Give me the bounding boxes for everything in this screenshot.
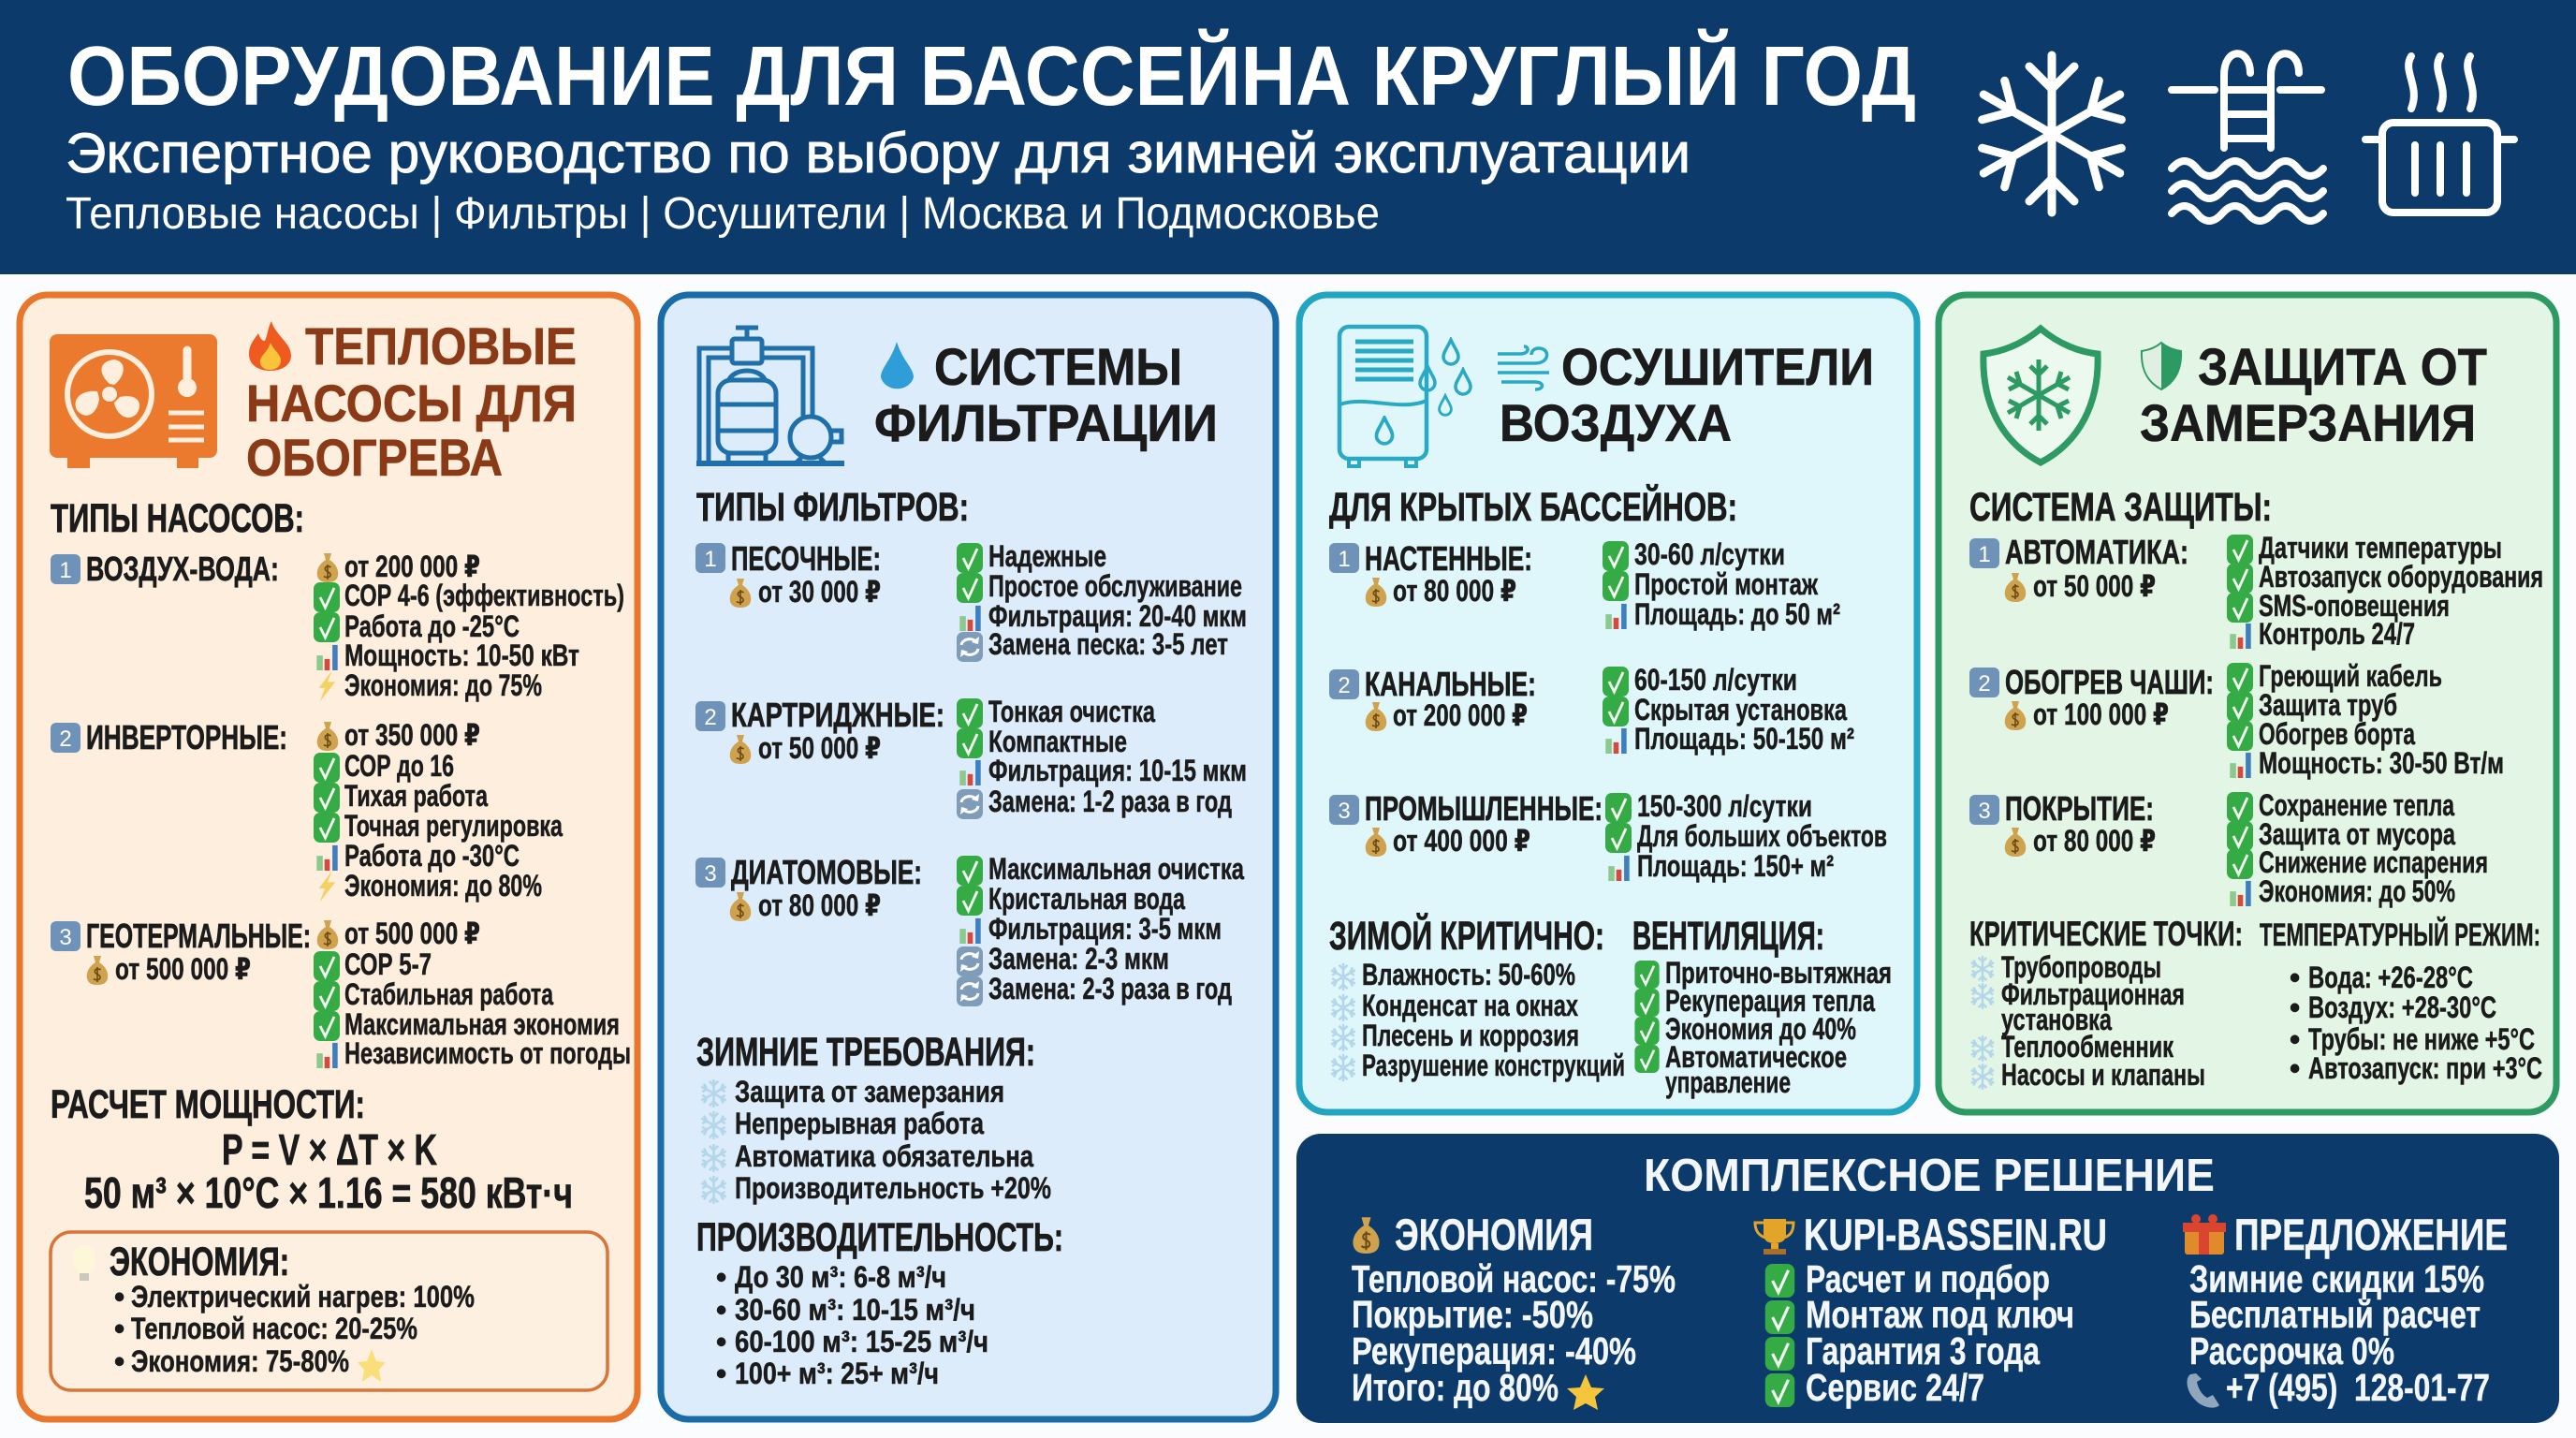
dehumidifier 1: wall: НАСТЕННЫЕ: (1365, 539, 1532, 578)
winter requirements: Автоматика обязательна (735, 1139, 1033, 1173)
temperature mode list: Вода: +26-28°C (2308, 961, 2473, 994)
critical points list: Трубопроводы (2001, 950, 2161, 984)
column: kupi-bassein.ru: KUPI-BASSEIN.RU (1804, 1210, 2107, 1259)
filter type 3: diatomite (695, 852, 1244, 1006)
dehumidifier 1: wall: Простой монтаж (1634, 567, 1818, 601)
icon: phone (2188, 1373, 2219, 1408)
ventilation list: Экономия до 40% (1665, 1012, 1856, 1046)
critical points list: Насосы и клапаны (2001, 1058, 2205, 1092)
dehumidifier 3: industrial (1329, 789, 1887, 883)
heading: freeze protection (2140, 337, 2487, 452)
protection 2: bowl heating: ОБОГРЕВ ЧАШИ: (2005, 663, 2214, 701)
icon: dehumidifier (1339, 327, 1471, 466)
pump type 3: geothermal: от 500 000 ₽ (344, 917, 480, 950)
pump type 1: air-water: Экономия: до 75% (344, 668, 542, 702)
performance list: 60-100 м³: 15-25 м³/ч (735, 1325, 988, 1358)
performance list: До 30 м³: 6-8 м³/ч (735, 1260, 946, 1294)
pump type 2: inverter: от 350 000 ₽ (344, 718, 480, 752)
column: offer (2183, 1210, 2508, 1409)
protection 3: cover: Сохранение тепла (2259, 788, 2454, 822)
critical points list: КРИТИЧЕСКИЕ ТОЧКИ: (1969, 915, 2243, 953)
performance list (696, 1215, 1063, 1390)
column: offer: ПРЕДЛОЖЕНИЕ (2234, 1210, 2508, 1259)
performance list: ПРОИЗВОДИТЕЛЬНОСТЬ: (696, 1215, 1063, 1260)
dehumidifier 2: ducted: от 200 000 ₽ (1393, 698, 1528, 732)
pump type 3: geothermal: 3 (59, 925, 72, 950)
filter type 2: cartridge (695, 695, 1247, 819)
column: kupi-bassein.ru: Сервис 24/7 (1806, 1366, 1984, 1409)
dehumidifier 3: industrial: 3 (1338, 799, 1351, 824)
performance list: • (716, 1260, 726, 1294)
protection 1: automation: SMS-оповещения (2259, 589, 2450, 623)
column: kupi-bassein.ru: Монтаж под ключ (1806, 1293, 2074, 1336)
filter type 2: cartridge: 2 (704, 705, 717, 730)
dehumidifier 1: wall: от 80 000 ₽ (1393, 574, 1516, 608)
icon: flame (249, 321, 291, 371)
filter type 1: sand: Замена песка: 3-5 лет (988, 627, 1228, 661)
heading: filtration: ФИЛЬТРАЦИИ (874, 393, 1218, 452)
column: savings: ЭКОНОМИЯ (1395, 1210, 1593, 1259)
filter type 3: diatomite: Замена: 2-3 мкм (988, 942, 1169, 976)
protection 2: bowl heating (1969, 659, 2504, 780)
pump type 2: inverter: Экономия: до 80% (344, 869, 542, 902)
filter type 2: cartridge: от 50 000 ₽ (758, 731, 881, 765)
pump type 1: air-water: ВОЗДУХ-ВОДА: (86, 550, 279, 588)
protection 3: cover: ПОКРЫТИЕ: (2005, 789, 2154, 828)
filter type 3: diatomite: от 80 000 ₽ (758, 888, 881, 922)
filter type 2: cartridge: Компактные (988, 725, 1127, 758)
icon: pool ladder (2172, 53, 2323, 221)
dehumidifier 1: wall: 30-60 л/сутки (1634, 537, 1785, 571)
temperature mode list: • (2290, 990, 2300, 1024)
icon: star (358, 1349, 386, 1382)
heading: dehumidifiers: ВОЗДУХА (1500, 393, 1732, 452)
callout: savings: Экономия: 75-80% (131, 1344, 349, 1378)
heading: freeze protection: ЗАМЕРЗАНИЯ (2140, 393, 2476, 452)
callout: savings: Электрический нагрев: 100% (131, 1280, 475, 1313)
callout: savings: • (114, 1312, 124, 1345)
panel: filtration systems (661, 295, 1276, 1419)
callout: savings: Тепловой насос: 20-25% (131, 1312, 417, 1345)
dehumidifier 1: wall (1329, 537, 1840, 631)
filter type 1: sand: Простое обслуживание (988, 569, 1242, 603)
panel: complete solution (1296, 1134, 2559, 1423)
panel: heat pumps (20, 295, 637, 1419)
winter requirements: Непрерывная работа (735, 1107, 984, 1140)
pump type 1: air-water: Работа до -25°C (344, 609, 520, 643)
protection 1: automation: 1 (1978, 542, 1991, 567)
power calculation: РАСЧЕТ МОЩНОСТИ: (51, 1082, 365, 1127)
section heading: filter types: ТИПЫ ФИЛЬТРОВ: (696, 485, 969, 530)
winter critical list (1329, 913, 1625, 1082)
pump type 3: geothermal: Максимальная экономия (344, 1007, 620, 1041)
header banner (0, 0, 2576, 274)
pump type 1: air-water (51, 550, 624, 702)
protection 2: bowl heating: Мощность: 30-50 Вт/м (2259, 746, 2504, 780)
protection 2: bowl heating: Обогрев борта (2259, 717, 2415, 751)
dehumidifier 3: industrial: Площадь: 150+ м² (1637, 849, 1834, 883)
performance list: • (716, 1325, 726, 1358)
filter type 1: sand: от 30 000 ₽ (758, 575, 881, 609)
pump type 1: air-water: 1 (59, 558, 72, 583)
dehumidifier 2: ducted: Скрытая установка (1634, 693, 1847, 726)
ventilation list (1632, 914, 1892, 1099)
pump type 3: geothermal: Независимость от погоды (344, 1036, 631, 1070)
winter requirements (696, 1030, 1051, 1205)
winter critical list: Разрушение конструкций (1362, 1049, 1625, 1082)
pump type 3: geothermal: от 500 000 ₽ (115, 952, 251, 986)
critical points list: установка (2001, 1003, 2112, 1036)
column: offer: Зимние скидки 15% (2189, 1257, 2484, 1300)
heading: heat pumps: ОБОГРЕВА (246, 428, 503, 487)
pump type 3: geothermal (51, 917, 631, 1070)
pump type 2: inverter (51, 718, 563, 902)
icon: water drop (881, 342, 914, 389)
winter critical list: ЗИМОЙ КРИТИЧНО: (1329, 913, 1604, 959)
column: savings: Рекуперация: -40% (1352, 1329, 1636, 1372)
filter type 3: diatomite: Замена: 2-3 раза в год (988, 972, 1232, 1005)
column: savings: Покрытие: -50% (1352, 1293, 1593, 1336)
heading: heat pumps (246, 316, 577, 487)
filter type 3: diatomite: Фильтрация: 3-5 мкм (988, 912, 1222, 946)
winter critical list: Влажность: 50-60% (1362, 958, 1575, 991)
protection 1: automation: от 50 000 ₽ (2033, 569, 2156, 603)
protection 2: bowl heating: 2 (1978, 671, 1991, 697)
dehumidifier 2: ducted: Площадь: 50-150 м² (1634, 722, 1854, 756)
filter type 1: sand: Надежные (988, 539, 1106, 573)
ventilation list: управление (1665, 1065, 1791, 1099)
dehumidifier 1: wall: Площадь: до 50 м² (1634, 597, 1840, 631)
filter type 2: cartridge: Тонкая очистка (988, 695, 1155, 728)
callout: savings: • (114, 1280, 124, 1313)
temperature mode list: Воздух: +28-30°C (2308, 990, 2496, 1024)
title: ОБОРУДОВАНИЕ ДЛЯ БАССЕЙНА КРУГЛЫЙ ГОД (67, 27, 1916, 124)
section heading: for indoor pools: ДЛЯ КРЫТЫХ БАССЕЙНОВ: (1329, 484, 1737, 530)
protection 3: cover: Защита от мусора (2259, 817, 2455, 851)
temperature mode list (2260, 917, 2542, 1085)
protection 2: bowl heating: Греющий кабель (2259, 659, 2442, 693)
callout: savings: ЭКОНОМИЯ: (110, 1240, 289, 1284)
filter type 1: sand: 1 (704, 547, 717, 572)
column: offer: Рассрочка 0% (2189, 1329, 2394, 1372)
icon: light bulb (73, 1245, 95, 1281)
column: kupi-bassein.ru: Гарантия 3 года (1806, 1329, 2041, 1372)
icon: shield with snowflake (1983, 329, 2098, 462)
icon: small shield (2142, 343, 2181, 389)
protection 1: automation: АВТОМАТИКА: (2005, 533, 2188, 571)
panel heading: КОМПЛЕКСНОЕ РЕШЕНИЕ (1644, 1151, 2215, 1201)
pump type 3: geothermal: ГЕОТЕРМАЛЬНЫЕ: (86, 917, 311, 955)
protection 2: bowl heating: Защита труб (2259, 688, 2397, 722)
pump type 1: air-water: СОР 4-6 (эффективность) (344, 579, 624, 612)
filter type 3: diatomite: 3 (704, 861, 717, 887)
icon: snowflake (1972, 55, 2131, 213)
temperature mode list: • (2290, 961, 2300, 994)
column: offer: +7 (495) 128-01-77 (2226, 1366, 2490, 1409)
dehumidifier 3: industrial: Для больших объектов (1637, 819, 1887, 853)
column: kupi-bassein.ru: Расчет и подбор (1806, 1257, 2050, 1300)
filter type 2: cartridge: Фильтрация: 10-15 мкм (988, 754, 1247, 787)
dehumidifier 2: ducted: 60-150 л/сутки (1634, 663, 1797, 697)
subtitle: Экспертное руководство по выбору для зимней эксплуатации (66, 122, 1690, 184)
ventilation list: Рекуперация тепла (1665, 984, 1875, 1018)
section heading: pump types: ТИПЫ НАСОСОВ: (51, 496, 304, 541)
icon: radiator with steam (2365, 56, 2514, 213)
protection 1: automation: Контроль 24/7 (2259, 617, 2415, 651)
heading: heat pumps: НАСОСЫ ДЛЯ (246, 374, 577, 433)
heading: dehumidifiers (1498, 337, 1874, 452)
tagline: Тепловые насосы | Фильтры | Осушители | Москва и Подмосковье (66, 189, 1380, 239)
pump type 2: inverter: Тихая работа (344, 779, 488, 813)
filter type 2: cartridge: КАРТРИДЖНЫЕ: (731, 696, 944, 734)
heading: heat pumps: ТЕПЛОВЫЕ (305, 316, 577, 375)
column: savings (1352, 1210, 1676, 1410)
filter type 1: sand (695, 539, 1247, 662)
section heading: protection system: СИСТЕМА ЗАЩИТЫ: (1969, 485, 2272, 530)
filter type 3: diatomite: Максимальная очистка (988, 852, 1244, 886)
column: savings: Тепловой насос: -75% (1352, 1257, 1676, 1300)
pump type 2: inverter: Точная регулировка (344, 809, 563, 843)
heading: freeze protection: ЗАЩИТА ОТ (2198, 337, 2487, 396)
icon: trophy (1755, 1219, 1793, 1255)
column: savings: Итого: до 80% (1352, 1366, 1559, 1409)
critical points list: Фильтрационная (2001, 977, 2185, 1011)
winter requirements: ЗИМНИЕ ТРЕБОВАНИЯ: (696, 1030, 1035, 1075)
panel: air dehumidifiers (1299, 295, 1917, 1112)
column: offer: Бесплатный расчет (2189, 1293, 2481, 1336)
winter critical list: Конденсат на окнах (1362, 989, 1578, 1022)
dehumidifier 2: ducted: КАНАЛЬНЫЕ: (1365, 665, 1536, 703)
power calculation (51, 1082, 573, 1217)
protection 1: automation (1969, 531, 2543, 651)
pump type 3: geothermal: СОР 5-7 (344, 947, 432, 981)
ventilation list: ВЕНТИЛЯЦИЯ: (1632, 914, 1824, 959)
temperature mode list: • (2290, 1022, 2300, 1056)
performance list: • (716, 1357, 726, 1390)
callout: savings: • (114, 1344, 124, 1378)
pump type 1: air-water: от 200 000 ₽ (344, 550, 480, 583)
performance list: 100+ м³: 25+ м³/ч (735, 1357, 939, 1390)
winter critical list: Плесень и коррозия (1362, 1019, 1579, 1052)
panel: freeze protection (1939, 295, 2556, 1112)
icon: star (1567, 1374, 1604, 1410)
filter type 3: diatomite: Кристальная вода (988, 882, 1185, 916)
temperature mode list: • (2290, 1051, 2300, 1085)
column: kupi-bassein.ru (1755, 1210, 2107, 1409)
icon: gift (2183, 1214, 2226, 1255)
filter type 2: cartridge: Замена: 1-2 раза в год (988, 785, 1232, 818)
winter requirements: Производительность +20% (735, 1171, 1051, 1205)
icon: heat pump unit (50, 334, 217, 468)
filter type 3: diatomite: ДИАТОМОВЫЕ: (731, 853, 922, 891)
heading: filtration: СИСТЕМЫ (934, 337, 1182, 396)
power calculation: 50 м³ × 10°C × 1.16 = 580 кВт·ч (84, 1168, 573, 1217)
power calculation: P = V × ΔT × K (222, 1125, 437, 1174)
dehumidifier 2: ducted (1329, 663, 1854, 756)
protection 3: cover: 3 (1978, 799, 1991, 824)
pump type 3: geothermal: Стабильная работа (344, 977, 553, 1011)
pump type 2: inverter: СОР до 16 (344, 749, 454, 783)
filter type 1: sand: ПЕСОЧНЫЕ: (731, 539, 881, 578)
protection 3: cover: Снижение испарения (2259, 845, 2488, 879)
filter type 1: sand: Фильтрация: 20-40 мкм (988, 599, 1247, 633)
pump type 2: inverter: Работа до -30°C (344, 839, 520, 873)
dehumidifier 3: industrial: от 400 000 ₽ (1393, 824, 1530, 858)
pump type 1: air-water: Мощность: 10-50 кВт (344, 638, 579, 672)
winter requirements: Защита от замерзания (735, 1075, 1004, 1108)
performance list: 30-60 м³: 10-15 м³/ч (735, 1293, 975, 1327)
pump type 2: inverter: 2 (59, 726, 72, 752)
dehumidifier 2: ducted: 2 (1338, 673, 1351, 698)
protection 3: cover: Экономия: до 50% (2259, 874, 2455, 908)
heading: dehumidifiers: ОСУШИТЕЛИ (1561, 337, 1874, 396)
pump type 2: inverter: ИНВЕРТОРНЫЕ: (86, 718, 287, 756)
dehumidifier 3: industrial: ПРОМЫШЛЕННЫЕ: (1365, 789, 1603, 828)
protection 2: bowl heating: от 100 000 ₽ (2033, 697, 2169, 731)
ventilation list: Автоматическое (1665, 1040, 1847, 1074)
icon: sand filter and pump (696, 328, 844, 463)
ventilation list: Приточно-вытяжная (1665, 956, 1892, 990)
critical points list (1969, 915, 2243, 1092)
performance list: • (716, 1293, 726, 1327)
heading: filtration (874, 337, 1218, 452)
dehumidifier 3: industrial: 150-300 л/сутки (1637, 789, 1812, 823)
critical points list: Теплообменник (2001, 1030, 2174, 1064)
protection 3: cover: от 80 000 ₽ (2033, 824, 2156, 858)
dehumidifier 1: wall: 1 (1338, 547, 1351, 572)
icon: wind (1498, 346, 1549, 389)
protection 3: cover (1969, 788, 2488, 908)
callout: savings (51, 1232, 607, 1390)
